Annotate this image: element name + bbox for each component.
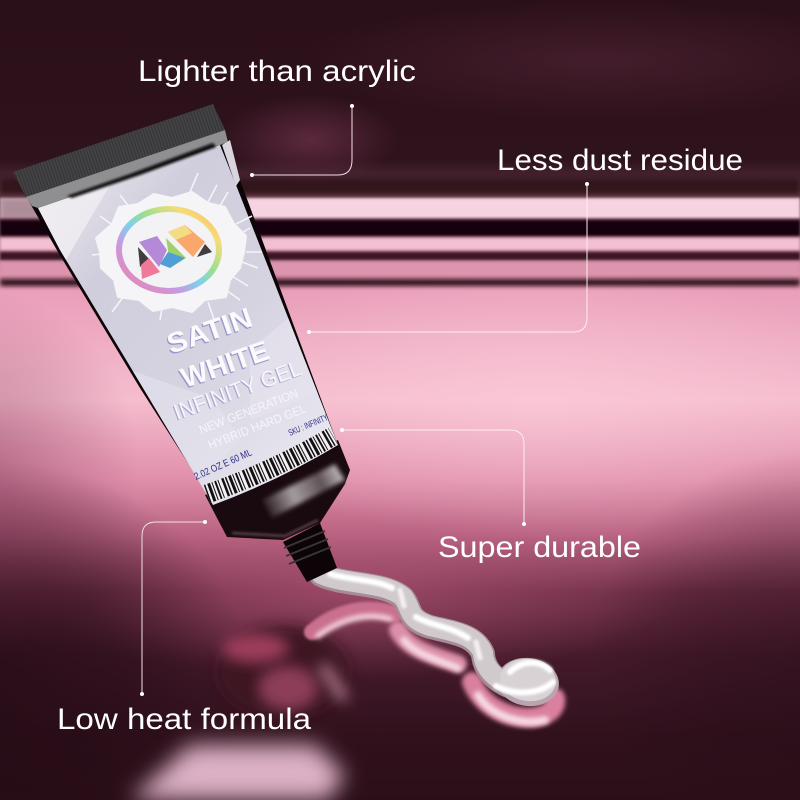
product name: SATIN <box>163 302 256 360</box>
tube body <box>27 130 338 505</box>
product name: INFINITY GEL <box>170 355 305 425</box>
product name: 2.02 OZ E 60 ML <box>193 447 254 483</box>
shoulder highlight <box>262 464 345 518</box>
paste squiggle <box>321 574 562 710</box>
shoulder lower reflection <box>232 520 318 536</box>
callout: Super durable: Super durable <box>438 531 641 564</box>
shoulder <box>205 440 350 540</box>
callout: Less dust residue <box>307 144 743 334</box>
product name: WHITE <box>177 335 273 394</box>
nozzle <box>283 523 337 582</box>
paste reflection <box>312 610 555 722</box>
logo mark <box>138 225 212 279</box>
product name: SATIN <box>162 303 255 361</box>
barcode <box>207 436 333 494</box>
cap rim <box>26 130 228 208</box>
product name: WHITE <box>176 336 272 395</box>
tube <box>13 104 350 582</box>
product name: INFINITY GEL <box>169 356 304 426</box>
nozzle threads <box>284 531 331 564</box>
cap <box>13 104 225 197</box>
splash <box>92 173 262 322</box>
callout: Super durable <box>340 428 641 564</box>
reflection of tube on the surface <box>130 626 349 800</box>
product name: SKU : INFINITY <box>287 412 329 438</box>
product name <box>162 302 329 483</box>
callout: Low heat formula <box>57 520 311 736</box>
label <box>38 145 340 505</box>
side sliver <box>222 140 240 186</box>
callout: Low heat formula: Low heat formula <box>57 703 311 736</box>
logo ring <box>119 209 219 291</box>
callout: Lighter than acrylic <box>138 55 416 177</box>
product name: NEW GENERATION <box>197 386 300 437</box>
rim shadow streak <box>67 143 216 198</box>
product name: HYBRID HARD GEL <box>206 401 308 452</box>
callout: Lighter than acrylic: Lighter than acrylic <box>138 55 416 88</box>
callout: Less dust residue: Less dust residue <box>497 144 743 177</box>
